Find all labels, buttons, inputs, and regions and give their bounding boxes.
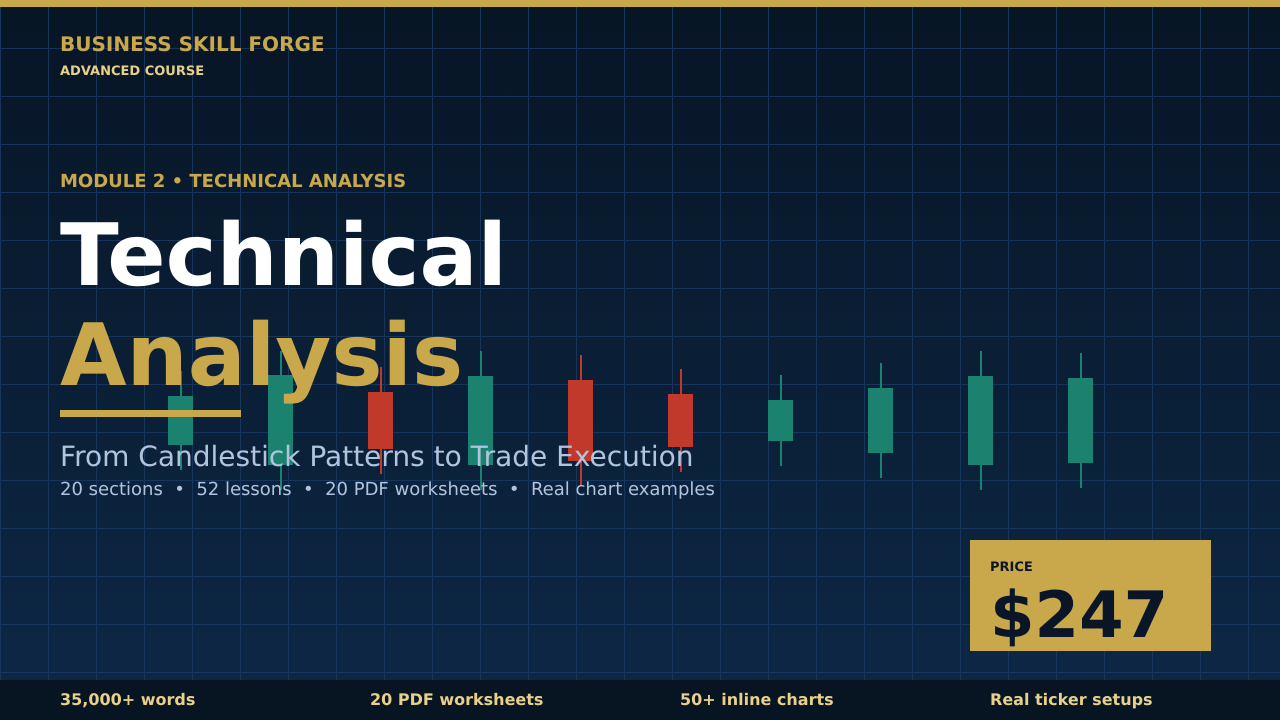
feature: word count: 35,000+ words xyxy=(60,690,195,709)
price label: PRICE xyxy=(990,560,1033,575)
candle 3 xyxy=(368,367,393,474)
title line 2: Analysis xyxy=(60,306,463,406)
candle 6 xyxy=(668,369,693,472)
footer bar xyxy=(0,680,1280,720)
course stats line: 20 sections • 52 lessons • 20 PDF worksheets • Real chart examples xyxy=(60,479,715,500)
top accent bar xyxy=(0,0,1280,7)
course level: ADVANCED COURSE xyxy=(60,64,204,79)
candle 9 xyxy=(968,351,993,490)
candle 1 xyxy=(168,371,193,470)
price box xyxy=(970,540,1211,651)
feature: tickers: Real ticker setups xyxy=(990,690,1153,709)
candle 7 xyxy=(768,375,793,466)
candle 2 xyxy=(268,351,293,490)
candle 10 xyxy=(1068,353,1093,488)
subtitle: From Candlestick Patterns to Trade Execution xyxy=(60,440,694,473)
candle 8 xyxy=(868,363,893,478)
candle 4 xyxy=(468,351,493,490)
module label: MODULE 2 • TECHNICAL ANALYSIS xyxy=(60,171,406,192)
brand name: BUSINESS SKILL FORGE xyxy=(60,32,325,56)
feature: worksheets: 20 PDF worksheets xyxy=(370,690,543,709)
price value: $247 xyxy=(990,579,1168,653)
title line 1: Technical xyxy=(60,206,507,306)
candle 5 xyxy=(568,355,593,486)
title underline xyxy=(60,410,241,417)
feature: charts: 50+ inline charts xyxy=(680,690,834,709)
